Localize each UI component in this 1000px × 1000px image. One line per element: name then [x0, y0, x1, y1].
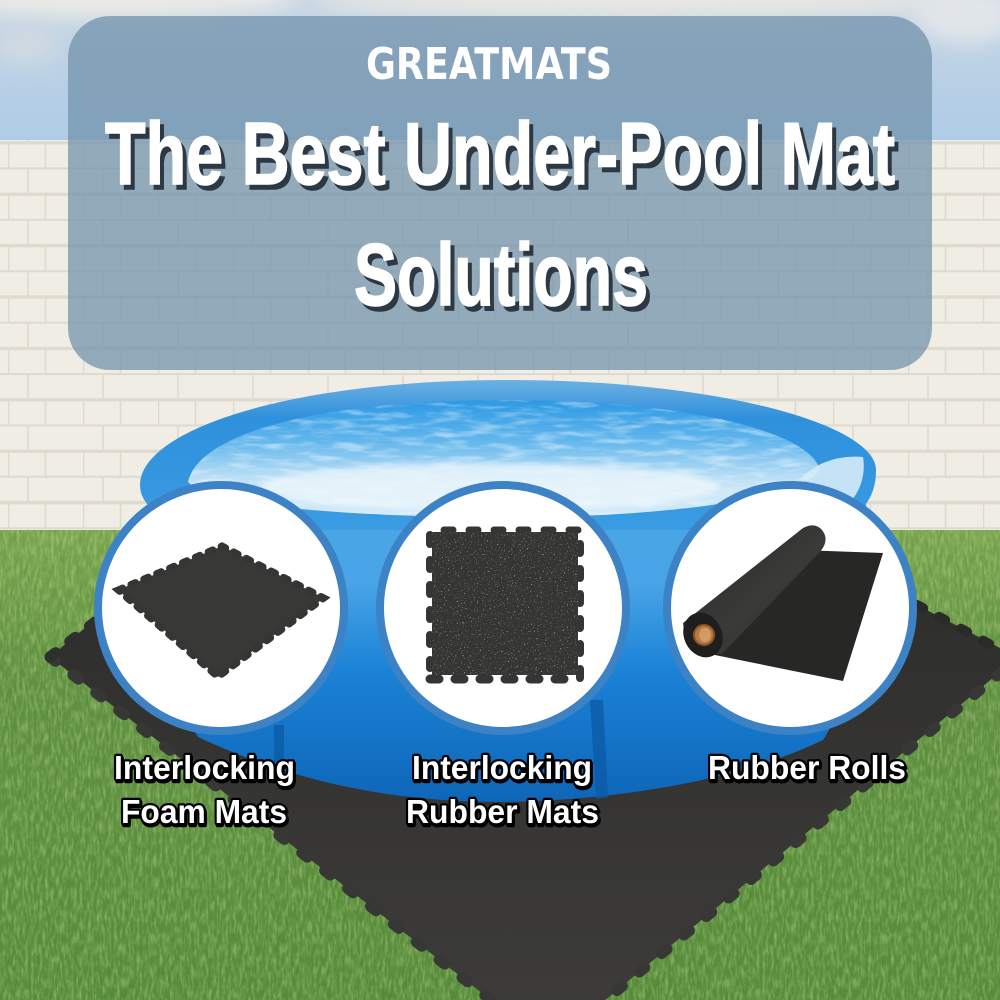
label: Interlocking Rubber Mats [406, 749, 599, 830]
large black interlocking mat under pool [50, 500, 1000, 1000]
panel: foam mats circle [98, 485, 344, 731]
pool rim [140, 380, 876, 530]
grass lawn [0, 530, 1000, 1000]
icon: interlocking rubber mat [430, 530, 581, 680]
icon: interlocking foam mat [118, 546, 324, 677]
panel: rubber mats circle [380, 485, 626, 731]
label: Interlocking Rubber Mats: Interlocking [412, 749, 592, 786]
pool water [188, 400, 820, 517]
pool body [152, 490, 866, 802]
panel: title backdrop [68, 16, 932, 370]
heading: title: Solutions [354, 225, 648, 324]
label: Interlocking Rubber Mats: Rubber Mats [406, 793, 599, 830]
icon: rubber roll [676, 525, 883, 681]
panel: rubber rolls circle [667, 485, 913, 731]
label: Interlocking Foam Mats: Foam Mats [121, 793, 287, 830]
label: Interlocking Foam Mats [114, 749, 295, 830]
label: Interlocking Foam Mats: Interlocking [114, 749, 295, 786]
brick wall [0, 140, 1000, 535]
heading: title [105, 104, 895, 324]
sky background [0, 0, 1000, 145]
label: Rubber Rolls: Rubber Rolls [708, 749, 906, 786]
inflatable pool [140, 380, 876, 802]
pool support stripes [274, 700, 608, 799]
logo: GREATMATS: GREATMATS [366, 39, 612, 90]
